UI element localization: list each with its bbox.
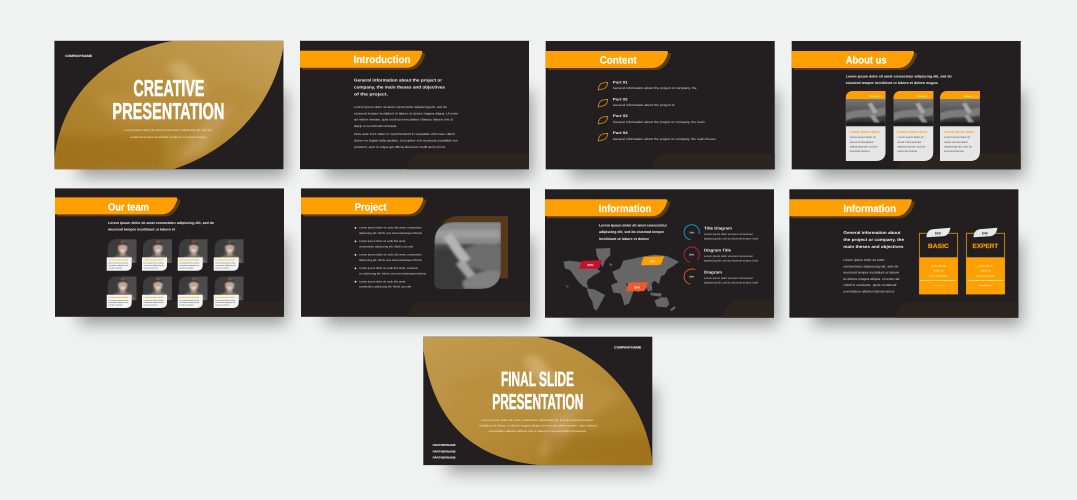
list item 1 xyxy=(598,80,697,90)
body text xyxy=(354,105,459,149)
list item 2: General information about the project or xyxy=(613,103,675,107)
bullet list: Lorem ipsum dolor sit undo this amet, xyxy=(359,280,406,283)
team card 8: Lorem ipsum dolor sit amet xyxy=(215,299,236,302)
body text: et dolore magna aliqua. Ut enim ad xyxy=(843,277,900,281)
price card: expert: $45 xyxy=(982,232,988,236)
list item 2 xyxy=(598,97,675,107)
card 1: adipiscing elit, sed do xyxy=(850,146,878,148)
card 2: Lorem ipsum dolor sit xyxy=(897,136,924,139)
body text xyxy=(843,258,900,293)
main title: PRESENTATION xyxy=(112,98,224,124)
body text: eiusmod tempor incididunt ut labore xyxy=(843,270,899,274)
leaf photo shape xyxy=(423,337,652,465)
team card 2 xyxy=(142,239,172,271)
bullet list: Lorem ipsum dolor sit undo this amet, consecte xyxy=(359,267,419,270)
team card 7: Lorem ipsum dolor xyxy=(179,296,199,299)
card 3: Lorem ipsum dolor sit xyxy=(944,136,970,139)
team card 8: sed do eiusmod xyxy=(215,304,229,307)
company name: COMPANYNAME xyxy=(65,54,92,58)
header band: Content xyxy=(600,55,637,67)
team card 6 xyxy=(142,276,172,308)
card 2: Lorem ipsum dolor xyxy=(897,130,928,134)
intro text: adipiscing elit, sed do eiusmod tempor xyxy=(599,230,665,234)
team card 6: Lorem ipsum dolor sit amet xyxy=(144,299,164,302)
team card 7: consectetur adipiscing elit xyxy=(179,301,200,304)
team card 2: consectetur adipiscing elit xyxy=(144,264,164,267)
header band xyxy=(546,51,671,70)
team card 7: Lorem ipsum dolor sit amet xyxy=(179,299,200,302)
price card: expert: dolor sit xyxy=(980,269,991,272)
team card 7 xyxy=(178,276,208,308)
lead text xyxy=(354,77,446,96)
main title: CREATIVE xyxy=(133,75,204,101)
card 1: eiusmod tempor xyxy=(850,150,870,153)
bullet list: adipiscing elit. Morbi una sed scelerisque lobortis xyxy=(359,232,423,235)
price card: expert: amet consectetur xyxy=(976,274,995,277)
donut: diagram: Lorem ipsum dolor sit amet consectetur xyxy=(704,277,753,280)
list item 1: Part 01 xyxy=(613,80,628,84)
body text: Duis aute irure dolor in reprehenderit in voluptate velit esse cillum xyxy=(354,132,456,136)
card 3: amet consectetur xyxy=(944,141,968,144)
slide 2: introduction xyxy=(300,41,532,177)
intro text: eiusmod tempor incididunt ut labore et xyxy=(108,228,176,232)
header band xyxy=(792,51,917,70)
slide 6: project xyxy=(301,188,533,324)
donut: diagram xyxy=(683,268,759,285)
main title: PRESENTATION xyxy=(492,390,583,414)
team card 4 xyxy=(214,239,244,271)
map tag: 50%: 50% xyxy=(634,285,640,289)
list item 1: General information about the project or company, the xyxy=(613,86,697,90)
price card: expert xyxy=(966,228,1005,294)
header band: Project xyxy=(355,201,387,213)
donut: diagram: adipiscing elit, sed do eiusmod tempor incid xyxy=(704,282,759,285)
price card: basic: $50 xyxy=(935,232,941,236)
team card 1: consectetur adipiscing elit xyxy=(108,264,129,267)
bullet list: tur adipiscing elit. Morbi una sed scelerisque lobortis xyxy=(359,272,427,275)
intro text: Lorem ipsum dolor sit amet consectetur adipiscing elit, sed do xyxy=(108,221,214,225)
card 1: amet consectetur xyxy=(850,141,874,144)
subtitle text: exercitation ullamco laboris nisi ut aliquip ex ea commodo consequat. xyxy=(489,429,587,433)
header band: Introduction xyxy=(354,54,410,66)
world map xyxy=(563,248,679,311)
bullet list xyxy=(355,227,427,289)
intro text xyxy=(846,74,952,85)
team card 1: sed do eiusmod xyxy=(108,266,122,269)
bullet list: Lorem ipsum dolor sit undo this amet, xyxy=(359,240,406,243)
body text: ad minim veniam, quis nostrud exercitation ullamco laboris nisi ut xyxy=(354,117,453,121)
body text: Lorem ipsum dolor sit amet xyxy=(843,258,885,262)
main title xyxy=(112,75,224,124)
donut: diagram title: 60% xyxy=(689,254,695,257)
bullet list: consectetur adipiscing elit. Morbi una sed xyxy=(359,286,412,289)
subtitle text: incididunt ut labore et dolore magna aliqua ut enim ad minim veniam, quis nostrud xyxy=(479,424,597,428)
list item 4 xyxy=(598,131,716,141)
subtitle text xyxy=(479,418,597,433)
lead text: main theses and objectives xyxy=(843,244,904,249)
intro text: eiusmod tempor incididunt ut labore et dolore magna xyxy=(846,81,938,85)
donut: title diagram xyxy=(683,223,759,241)
team card 4: Lorem ipsum dolor sit amet xyxy=(215,261,236,264)
card 3 xyxy=(940,91,980,161)
intro text: Lorem ipsum dolor sit amet consectetur adipiscing elit, sed do xyxy=(846,74,952,78)
price card: expert: adipiscing elit, sed do eiusmod tempor xyxy=(967,279,1004,282)
partner names xyxy=(433,443,456,460)
donut: title diagram: adipiscing elit, sed do eiusmod tempor incid xyxy=(704,237,759,240)
header band: About us xyxy=(846,55,887,67)
card 3: adipiscing elit, sed do xyxy=(944,146,973,148)
team card 7: sed do eiusmod xyxy=(179,304,193,307)
card 3: eiusmod tempor xyxy=(944,150,964,153)
main title xyxy=(492,368,583,414)
bullet list: consectetur adipiscing elit. Morbi una sed xyxy=(359,245,414,248)
list item 4: Part 04 xyxy=(613,131,628,135)
team card 5: consectetur adipiscing elit xyxy=(108,301,129,304)
map tag: 60%: 60% xyxy=(587,263,594,267)
intro text: incididunt ut labore et dolore xyxy=(599,237,649,241)
team card 5 xyxy=(107,276,137,308)
subtitle text: eiusmod tempor incididunt ut labore et dolore magna xyxy=(130,135,207,139)
subtitle text: Lorem ipsum dolor sit amet consectetur adipiscing elit, sed do xyxy=(124,128,212,132)
header band xyxy=(55,197,180,216)
body text: aliquip ex ea commodo consequat. xyxy=(354,124,397,128)
bullet list: Lorem ipsum dolor sit undo this amet, consectetur xyxy=(359,227,422,230)
team card 6: Lorem ipsum dolor xyxy=(144,296,164,299)
header band: Information xyxy=(599,203,651,215)
subtitle text xyxy=(124,128,212,139)
price card: basic: adipiscing elit, sed do eiusmod tempor xyxy=(920,279,957,282)
lead text: the project or company, the xyxy=(843,237,905,242)
intro text xyxy=(108,221,214,232)
slide 3: content xyxy=(546,41,778,177)
donut: title diagram: 75% xyxy=(689,231,695,234)
donut: diagram: 50% xyxy=(689,276,695,279)
team card 4: sed do eiusmod xyxy=(215,266,229,269)
team card 8: consectetur adipiscing elit xyxy=(215,301,236,304)
body text: minim veniam, quis nostrud xyxy=(843,283,897,287)
price card: expert: Lorem ipsum xyxy=(978,265,993,268)
team card 8 xyxy=(214,276,244,308)
body text: proident, sunt in culpa qui officia deserunt mollit anim id est xyxy=(354,145,445,149)
slide 8: information pricing xyxy=(789,189,1021,325)
donut: diagram title: adipiscing elit, sed do eiusmod tempor incid xyxy=(704,260,759,263)
team card 3: sed do eiusmod xyxy=(179,266,193,269)
donut: diagram title: Diagram Title xyxy=(704,248,732,253)
partner names: PARTNERNAME xyxy=(433,449,456,453)
header band: Our team xyxy=(108,201,149,213)
donut: diagram: Diagram xyxy=(704,270,723,275)
card 2: eiusmod tempor xyxy=(897,150,918,153)
donut: diagram title xyxy=(683,246,759,263)
team card 2: Lorem ipsum dolor xyxy=(144,259,164,262)
intro text: Lorem ipsum dolor sit amet consectetur xyxy=(599,223,668,227)
map tag: 50% xyxy=(626,282,648,291)
slide 1: creative presentation cover xyxy=(54,41,286,177)
map tag: 60% xyxy=(579,260,602,269)
team card 3: Lorem ipsum dolor sit amet xyxy=(179,261,200,264)
team card 2: Lorem ipsum dolor sit amet xyxy=(144,261,164,264)
header band xyxy=(545,199,670,218)
photo with hatched backing xyxy=(434,216,508,289)
price card: basic: amet consectetur xyxy=(929,274,948,277)
card 2: adipiscing elit, sed do xyxy=(897,146,926,148)
partner names: PARTNERNAME xyxy=(433,456,456,460)
partner names: PARTNERNAME xyxy=(433,443,456,447)
price card: expert: EXPERT xyxy=(973,243,998,250)
main title: FINAL SLIDE xyxy=(501,368,574,391)
card 1: Lorem ipsum dolor sit xyxy=(850,136,876,139)
price card: basic xyxy=(919,228,958,294)
price card: basic: dolor sit xyxy=(933,269,944,272)
bullet list: adipiscing elit. Morbi una sed scelerisque lobortis xyxy=(359,259,423,262)
map tag: 70% xyxy=(641,256,664,265)
lead text: company, the main theses and objectives xyxy=(354,84,446,89)
team card 1: Lorem ipsum dolor sit amet xyxy=(108,261,129,264)
bullet list: Lorem ipsum dolor sit undo this amet, consectetur xyxy=(359,254,422,257)
list item 3 xyxy=(598,114,705,124)
body text: dolore eu fugiat nulla pariatur. Excepteur sint occaecat cupidatat non xyxy=(354,138,458,142)
team card 4: consectetur adipiscing elit xyxy=(215,264,236,267)
company name: COMPANYNAME xyxy=(614,346,641,350)
lead text: General information about xyxy=(843,230,901,235)
team card 3: Lorem ipsum dolor xyxy=(179,259,199,262)
card 3: Category_1 xyxy=(963,95,978,98)
slide 5: our team xyxy=(55,188,287,324)
lead text: of the project. xyxy=(354,91,388,96)
team card 1: Lorem ipsum dolor xyxy=(108,259,128,262)
price card: basic: BASIC xyxy=(928,243,949,250)
header band: Information xyxy=(843,203,896,215)
header band xyxy=(789,199,915,218)
slide 9: final slide xyxy=(423,337,655,473)
team card 2: sed do eiusmod xyxy=(144,266,158,269)
price card: expert: incididunt xyxy=(979,284,992,287)
list item 2: Part 02 xyxy=(613,97,628,101)
card 1: Lorem ipsum dolor xyxy=(850,130,880,134)
list item 4: General information about the project or company, the main theses xyxy=(613,137,716,141)
card 2: Category_1 xyxy=(916,95,931,98)
team card 3: consectetur adipiscing elit xyxy=(179,264,200,267)
leaf photo shape xyxy=(54,41,283,169)
team card 6: sed do eiusmod xyxy=(144,304,158,307)
team card 3 xyxy=(178,239,208,271)
body text: eiusmod tempor incididunt ut labore et dolore magna aliqua. Ut enim xyxy=(354,111,459,115)
team card 6: consectetur adipiscing elit xyxy=(144,301,164,304)
donut: title diagram: Lorem ipsum dolor sit amet consectetur xyxy=(704,233,753,236)
list item 3: General information about the project or company, the main xyxy=(613,120,705,124)
lead text xyxy=(843,230,905,249)
donut: diagram title: Lorem ipsum dolor sit amet consectetur xyxy=(704,255,753,258)
card 3: Lorem ipsum dolor xyxy=(944,130,975,134)
team card 4: Lorem ipsum dolor xyxy=(215,259,235,262)
donut: title diagram: Title Diagram xyxy=(704,225,733,230)
team card 5: Lorem ipsum dolor sit amet xyxy=(108,299,129,302)
card 2 xyxy=(893,91,933,161)
team card 1 xyxy=(107,239,137,271)
price card: basic: Lorem ipsum xyxy=(931,265,946,268)
body text: consectetur adipiscing elit, sed do xyxy=(843,264,899,268)
slide 4: about us xyxy=(792,41,1024,177)
body text: Lorem ipsum dolor sit amet consectetur adipiscing elit, sed do xyxy=(354,105,447,109)
header band xyxy=(301,197,426,216)
team card 8: Lorem ipsum dolor xyxy=(215,296,235,299)
list item 3: Part 03 xyxy=(613,114,628,118)
team card 5: Lorem ipsum dolor xyxy=(108,296,128,299)
card 1: Category_1 xyxy=(869,95,883,98)
price card: basic: incididunt xyxy=(933,284,944,287)
header band xyxy=(300,51,425,70)
slide 7: information with map xyxy=(545,189,777,325)
intro text xyxy=(599,223,668,241)
team card 5: sed do eiusmod xyxy=(108,304,122,307)
card 1 xyxy=(846,91,886,161)
card 2: amet consectetur xyxy=(897,141,922,144)
body text: exercitation ullamco laboris nisi ut xyxy=(843,289,895,293)
map tag: 70%: 70% xyxy=(649,259,656,263)
lead text: General information about the project or xyxy=(354,77,442,82)
subtitle text: Lorem ipsum dolor sit amet consectetur adipiscing elit, sed do eiusmod tempor xyxy=(482,418,593,422)
